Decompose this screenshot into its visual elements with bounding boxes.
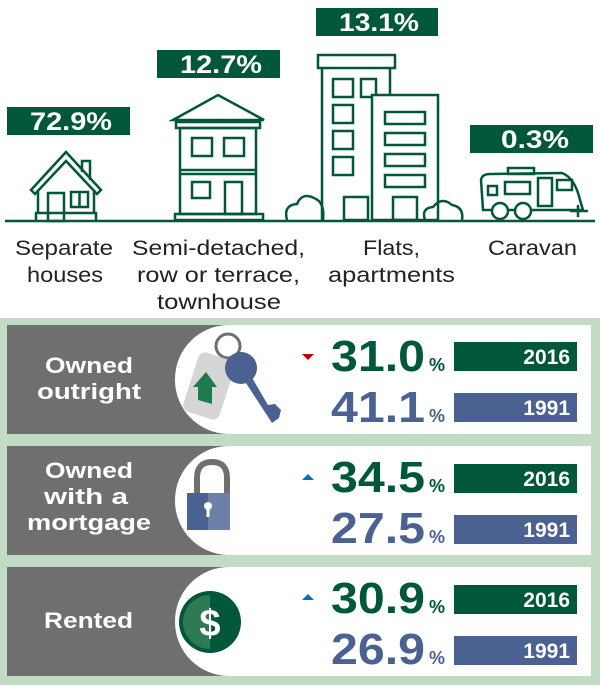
label: 13.1%: 13.1% (339, 9, 419, 37)
panel: owned with a mortgage: % (429, 476, 445, 496)
icon: flats (286, 55, 462, 220)
panel: owned with a mortgage: mortgage (27, 510, 151, 535)
icon: padlock (187, 462, 230, 530)
label text: separate houses: houses (27, 264, 103, 287)
icon: dollar coin (179, 591, 241, 653)
panel: rented: 2016 (523, 589, 570, 612)
panel: owned outright: 1991 (523, 397, 570, 420)
panel: owned outright (7, 325, 591, 434)
panel: owned outright: 31.0 (331, 332, 425, 381)
label: 0.3%: 0.3% (501, 126, 569, 154)
label: 72.9%: 72.9% (30, 108, 112, 136)
panel: owned with a mortgage: 2016 (523, 468, 570, 491)
panel: owned outright: % (429, 355, 445, 375)
panel: rented: 1991 (523, 640, 570, 663)
indicator: up (302, 594, 314, 600)
indicator: down (302, 354, 314, 360)
panel: rented: Rented (44, 608, 133, 633)
panel: owned outright: 2016 (523, 346, 570, 369)
label: 13.1% (316, 8, 438, 37)
panel: owned with a mortgage (7, 446, 591, 555)
icon: caravan (481, 168, 588, 219)
label text: separate houses: Separate (15, 237, 113, 260)
panel: owned with a mortgage: with a (43, 484, 129, 509)
label: 12.7%: 12.7% (180, 51, 262, 79)
label text: semi-detached (132, 237, 305, 314)
panel: rented: 30.9 (331, 574, 425, 623)
panel: rented: 26.9 (331, 625, 425, 674)
label text: semi-detached: Semi-detached, (132, 237, 305, 260)
green background (0, 318, 600, 685)
panel: owned with a mortgage: 27.5 (331, 504, 425, 553)
label text: separate houses (15, 237, 113, 287)
icon: keys (181, 334, 281, 423)
icon: semi-detached townhouse (173, 95, 264, 220)
label: 72.9% (7, 107, 130, 136)
label text: flats: Flats, (363, 237, 420, 260)
panel: owned outright: outright (37, 379, 142, 404)
icon: separate house (31, 152, 101, 221)
panel: owned with a mortgage: 1991 (523, 519, 570, 542)
label text: semi-detached: row or terrace, (137, 264, 300, 287)
label text: semi-detached: townhouse (157, 291, 281, 314)
label: 0.3% (470, 125, 593, 154)
panel: rented (7, 567, 591, 676)
label text: caravan: Caravan (488, 237, 577, 260)
panel: rented: % (429, 597, 445, 617)
indicator: up (302, 474, 314, 480)
label text: flats (328, 237, 455, 287)
panel: owned outright: Owned (45, 353, 133, 378)
panel: owned with a mortgage: 34.5 (331, 453, 425, 502)
label: 12.7% (157, 50, 280, 79)
panel: owned with a mortgage: % (429, 527, 445, 547)
icon: dollar coin: $ (199, 603, 221, 645)
panel: owned outright: 41.1 (331, 383, 425, 432)
panel: rented: % (429, 648, 445, 668)
panel: owned with a mortgage: Owned (45, 458, 133, 483)
ground line (5, 220, 595, 222)
label text: flats: apartments (328, 264, 455, 287)
panel: owned outright: % (429, 406, 445, 426)
